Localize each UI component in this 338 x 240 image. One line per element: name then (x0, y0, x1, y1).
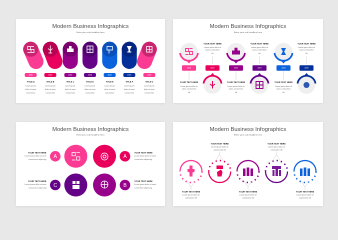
circle bottom left (64, 174, 87, 196)
ring 5 (294, 160, 316, 182)
panel: four circles (16, 122, 165, 206)
year tags and captions: consectetur (46, 92, 55, 94)
pill 2 (43, 42, 58, 62)
ring 4 (266, 160, 288, 183)
lower captions: YOUR TEXT HERE (239, 192, 258, 194)
lower captions: consectetur elit (185, 196, 198, 200)
subtitle: panel 3: Enter your sub headline here (76, 134, 105, 136)
ring 1 (180, 160, 202, 182)
upper captions: YOUR TEXT HERE (267, 144, 286, 146)
subtitle: panel 1: Enter your sub headline here (76, 31, 105, 34)
small badges (50, 151, 130, 190)
year tags: 2024 (282, 68, 286, 70)
year tags and captions: 2023 (88, 75, 92, 77)
year tags and captions: 2021 (48, 75, 52, 77)
upper text blocks: elit (305, 52, 308, 55)
year tags and captions: consectetur (66, 92, 75, 94)
year tags and captions: 2020 (29, 75, 33, 77)
year tags and captions: consectetur (26, 92, 36, 94)
year tags and captions: consectetur (125, 92, 134, 94)
side text blocks: consectetur adipiscing (29, 158, 46, 161)
lower text blocks: YOUR TEXT HERE (180, 82, 199, 84)
upper text blocks: amet, consectetur (299, 48, 314, 52)
year tags: 2022 (234, 68, 238, 70)
pill 3 (63, 42, 78, 62)
upper text blocks (203, 44, 316, 55)
year tags and captions: consectetur (85, 92, 95, 94)
lower text blocks: Lorem ipsum dolor sit (227, 85, 245, 88)
year tags and captions: TITLE F (125, 82, 134, 84)
year tags and captions: TITLE E (106, 82, 114, 84)
year tags and captions: Lorem ipsum (124, 86, 135, 88)
upper text blocks: amet, consectetur (205, 48, 220, 52)
ring 3 (237, 160, 259, 182)
panel: alternating timeline (173, 19, 323, 103)
year tags and captions: dolor sit amet (104, 88, 116, 91)
year tags and captions: Lorem ipsum (85, 86, 96, 88)
small badges: C (53, 183, 57, 189)
year tags and captions: Lorem ipsum (144, 86, 155, 88)
title: panel 4: Modern Business Infographics (210, 127, 286, 133)
lower text blocks: elit (282, 91, 285, 94)
year tags and captions: dolor sit amet (45, 88, 56, 91)
connector lines (189, 56, 306, 80)
lower text blocks: Lorem ipsum dolor sit (275, 85, 293, 88)
year tags and captions: TITLE A (27, 80, 35, 84)
lower captions: YOUR TEXT HERE (296, 192, 315, 194)
year tags and captions: dolor sit amet (124, 88, 135, 91)
year tags and captions: TITLE G (145, 82, 154, 84)
lower captions: YOUR TEXT HERE (182, 192, 201, 194)
subtitle: panel 4: Enter your sub headline here (234, 134, 263, 136)
year tags and captions: consectetur (105, 92, 115, 94)
year tags and captions: dolor sit amet (144, 88, 155, 91)
lower captions: Lorem ipsum dolor sit (296, 194, 314, 196)
side text blocks: Lorem ipsum dolor sit amet (25, 154, 47, 158)
connector lines (187, 152, 309, 190)
upper text blocks: YOUR TEXT HERE (297, 44, 316, 46)
upper text blocks: Lorem ipsum dolor sit (298, 46, 316, 49)
side text blocks (25, 152, 156, 190)
upper text blocks: elit (258, 52, 261, 55)
year tags and captions: 2026 (147, 75, 151, 77)
side text blocks: consectetur adipiscing (134, 158, 152, 161)
small badges: A (123, 154, 127, 160)
year tags: 2020 (187, 68, 191, 70)
upper text blocks: amet, consectetur (252, 48, 267, 52)
lower text blocks: elit (188, 91, 191, 94)
side text blocks: YOUR TEXT HERE (28, 152, 47, 154)
year tags and captions: 2025 (127, 75, 131, 77)
side text blocks: Lorem ipsum dolor sit amet (134, 183, 156, 186)
year tags and captions: TITLE C (66, 82, 75, 84)
year tags (182, 65, 314, 71)
year tags and captions: Lorem ipsum (105, 86, 115, 88)
year tags and captions: 2022 (68, 75, 72, 77)
ring 2 (209, 160, 231, 183)
year tags and captions: 2024 (108, 75, 112, 77)
side text blocks: YOUR TEXT HERE (134, 152, 153, 154)
pill 4 (82, 42, 98, 62)
lower text blocks: elit (235, 91, 238, 94)
lower text blocks: amet, consectetur (276, 88, 291, 90)
upper text blocks: Lorem ipsum dolor sit (251, 46, 269, 49)
side text blocks: Lorem ipsum dolor sit amet (25, 183, 47, 186)
year tags: 2021 (210, 68, 214, 70)
lower captions: consectetur elit (242, 196, 255, 200)
side text blocks: YOUR TEXT HERE (28, 181, 47, 183)
title: panel 3: Modern Business Infographics (52, 127, 129, 133)
year tags: 2025 (304, 68, 308, 70)
small badges: B (123, 183, 127, 189)
upper captions: consectetur elit (214, 148, 226, 152)
upper captions: consectetur elit (270, 148, 283, 152)
year tags and captions: TITLE B (46, 82, 55, 84)
year tags and captions: dolor sit amet (65, 88, 76, 91)
panel: ring infographic (173, 122, 323, 206)
side text blocks: YOUR TEXT HERE (134, 181, 153, 183)
lower text blocks: amet, consectetur (229, 88, 244, 90)
side text blocks: consectetur adipiscing (29, 186, 46, 190)
pill 7 (142, 42, 157, 62)
upper captions: Lorem ipsum dolor sit (268, 146, 286, 148)
upper text blocks: Lorem ipsum dolor sit (204, 46, 222, 49)
lower captions: consectetur elit (299, 196, 312, 200)
circle bottom right (93, 174, 116, 196)
lower text blocks (180, 82, 293, 94)
title: panel 2: Modern Business Infographics (210, 24, 286, 30)
upper text blocks: YOUR TEXT HERE (203, 44, 222, 46)
year tags and captions: Lorem ipsum (65, 86, 76, 88)
lower captions: Lorem ipsum dolor sit (239, 194, 257, 196)
year tags and captions: dolor sit amet (85, 88, 96, 91)
upper captions (211, 144, 286, 152)
year tags and captions: Lorem ipsum (26, 86, 36, 88)
lower markers (204, 73, 316, 94)
upper markers (180, 43, 292, 64)
year tags and captions: TITLE D (86, 82, 94, 84)
panel: pill infographic (16, 19, 165, 103)
lower text blocks: YOUR TEXT HERE (227, 82, 246, 84)
side text blocks: Lorem ipsum dolor sit amet (134, 154, 156, 158)
year tags and captions: consectetur (145, 92, 154, 94)
lower text blocks: amet, consectetur (182, 88, 197, 90)
title: panel 1: Modern Business Infographics (52, 24, 129, 30)
upper captions: YOUR TEXT HERE (211, 144, 229, 146)
pill 1 (23, 42, 38, 62)
lower captions: Lorem ipsum dolor sit (182, 194, 200, 196)
year tags and captions (25, 73, 155, 94)
side text blocks: consectetur adipiscing (134, 186, 152, 190)
lower text blocks: Lorem ipsum dolor sit (180, 85, 198, 88)
subtitle: panel 2: Enter your sub headline here (234, 31, 263, 34)
small badges: A (54, 154, 58, 160)
circle top right (93, 145, 116, 168)
year tags and captions: dolor sit amet (25, 88, 37, 91)
pill 6 (122, 42, 137, 62)
upper captions: Lorem ipsum dolor sit (211, 146, 229, 148)
upper text blocks: YOUR TEXT HERE (250, 44, 269, 46)
year tags: 2023 (258, 68, 262, 70)
lower text blocks: YOUR TEXT HERE (274, 82, 293, 84)
upper text blocks: elit (211, 52, 214, 55)
circle top left (64, 145, 87, 168)
year tags and captions: Lorem ipsum (45, 86, 56, 88)
lower captions (182, 192, 315, 200)
pill 5 (102, 42, 117, 62)
